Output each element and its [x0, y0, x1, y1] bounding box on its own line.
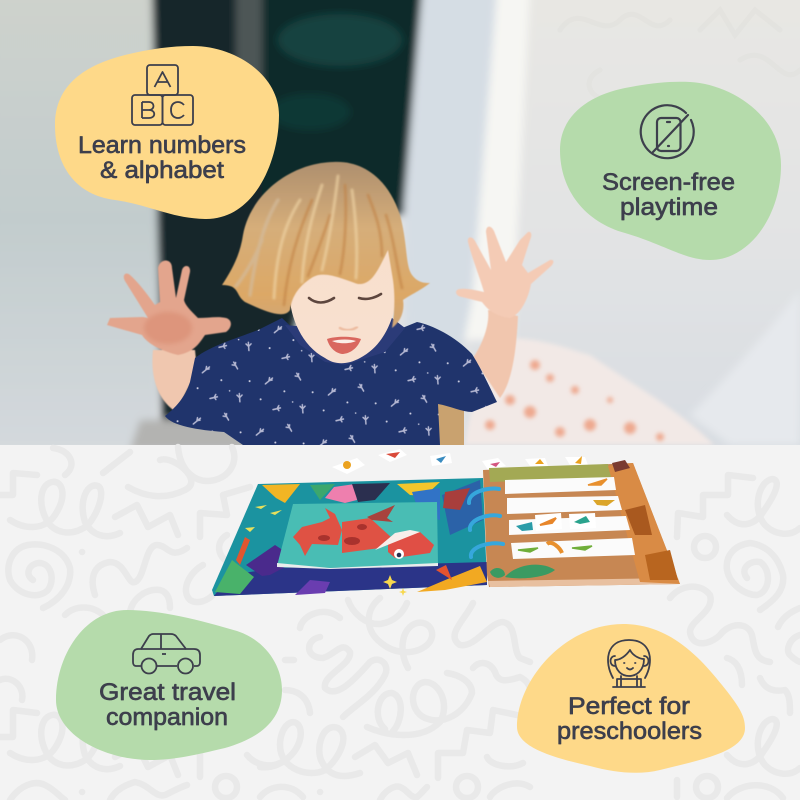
icon: alphabet blocks: [132, 65, 193, 125]
photo background: room: [0, 0, 800, 450]
loose tiles: [332, 449, 588, 474]
child photo illustration: [107, 162, 553, 445]
navy shirt: [165, 318, 497, 445]
label line two: playtime: [620, 194, 718, 221]
label line two: companion: [106, 704, 228, 731]
eyes: [309, 294, 381, 302]
blue binder rings: [469, 489, 503, 557]
label line two: preschoolers: [557, 718, 702, 745]
left page: jungle scene: [212, 478, 487, 596]
label: Perfect for: [568, 693, 690, 720]
badge: perfect for preschoolers: [517, 624, 745, 773]
icon: car: [133, 634, 200, 674]
label: Great travel: [99, 679, 236, 706]
answer rows: [505, 477, 635, 559]
nose: [340, 327, 357, 330]
wooden chair: [437, 402, 464, 445]
activity book: [212, 449, 680, 596]
icon: child: [608, 640, 650, 687]
icon: no phone: [641, 105, 694, 158]
badge: screen-free playtime: [560, 82, 781, 260]
label: Learn numbers: [78, 132, 246, 159]
sorting tiles: [516, 479, 615, 553]
red dinosaur: [293, 505, 434, 559]
blonde hair: [222, 162, 430, 328]
white pillow: [690, 290, 800, 445]
badge: great travel companion: [56, 610, 282, 760]
mouth: [327, 337, 361, 354]
right page: sorting board: [469, 460, 680, 587]
puzzle flaps: [277, 502, 438, 568]
label line two: & alphabet: [100, 157, 224, 184]
left arm and hand: [107, 260, 231, 412]
table surface with squiggle pattern: [0, 445, 800, 800]
right arm and hand: [456, 227, 553, 398]
badge: learn numbers and alphabet: [55, 46, 279, 219]
label: Screen-free: [602, 169, 735, 196]
floral cushion: [465, 338, 714, 445]
faint wall pattern: [560, 10, 800, 100]
head with face: [290, 225, 397, 363]
